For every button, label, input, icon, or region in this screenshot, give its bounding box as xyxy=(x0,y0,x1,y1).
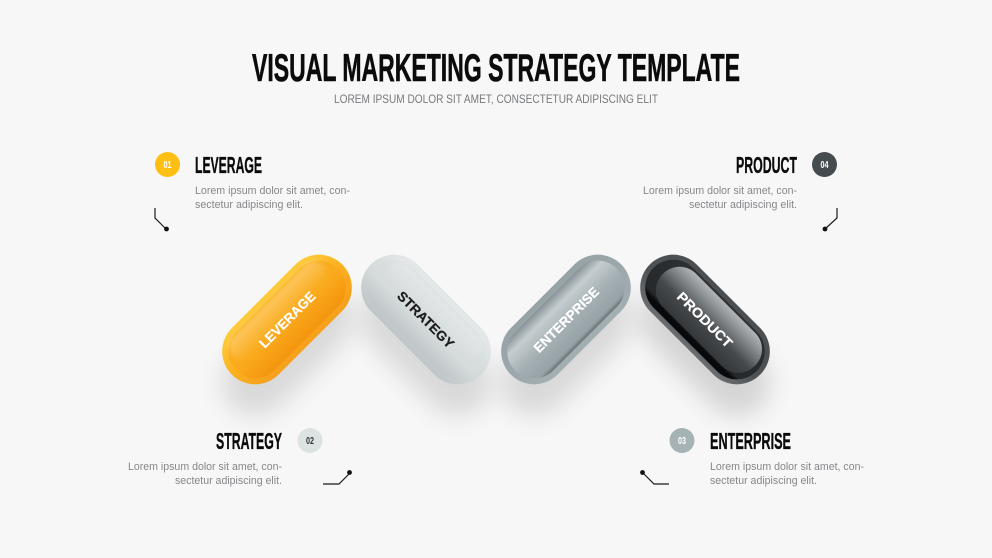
body text: enterprise xyxy=(710,461,864,487)
badge 04 xyxy=(812,152,837,177)
connector: enterprise xyxy=(640,470,669,484)
pill: enterprise: ENTERPRISE xyxy=(531,284,602,356)
badge 03: 03 xyxy=(678,436,686,447)
pill: strategy: STRATEGY xyxy=(394,288,457,351)
body text: product xyxy=(643,185,797,211)
badge 03 xyxy=(670,428,694,453)
heading: strategy: STRATEGY xyxy=(216,428,282,454)
badge 01 xyxy=(155,152,180,177)
body text: strategy xyxy=(128,461,282,487)
connector: product xyxy=(823,208,837,231)
connector: leverage xyxy=(155,208,169,231)
body text: product: sectetur adipiscing elit. xyxy=(689,199,797,211)
heading: leverage: LEVERAGE xyxy=(195,152,262,178)
callout: 04 product xyxy=(643,152,837,231)
body text: leverage: Lorem ipsum dolor sit amet, con- xyxy=(195,185,350,197)
badge 01: 01 xyxy=(164,160,172,171)
body text: enterprise: sectetur adipiscing elit. xyxy=(710,475,817,487)
pill: leverage xyxy=(209,241,365,429)
pill: strategy xyxy=(348,241,504,429)
heading: product: PRODUCT xyxy=(736,152,797,178)
body text: strategy: Lorem ipsum dolor sit amet, con- xyxy=(128,461,282,473)
pill: product: PRODUCT xyxy=(674,289,736,351)
connector: strategy xyxy=(323,470,352,484)
body text: enterprise: Lorem ipsum dolor sit amet, con- xyxy=(710,461,864,473)
badge 02: 02 xyxy=(306,436,314,447)
subtitle: LOREM IPSUM DOLOR SIT AMET, CONSECTETUR ADIPISCING ELIT xyxy=(334,94,658,106)
badge 02 xyxy=(298,428,322,453)
pill: leverage: LEVERAGE xyxy=(256,289,318,351)
body text: product: Lorem ipsum dolor sit amet, con- xyxy=(643,185,797,197)
body text: leverage xyxy=(195,185,350,211)
body text: strategy: sectetur adipiscing elit. xyxy=(175,475,282,487)
pill: enterprise xyxy=(488,241,644,429)
body text: leverage: sectetur adipiscing elit. xyxy=(195,199,303,211)
callout: 03 enterprise xyxy=(640,428,864,487)
callout: 02 strategy xyxy=(128,428,352,487)
pill: product xyxy=(627,241,783,429)
callout: 01 leverage xyxy=(155,152,350,231)
badge 04: 04 xyxy=(820,160,829,171)
heading: enterprise: ENTERPRISE xyxy=(710,428,791,454)
